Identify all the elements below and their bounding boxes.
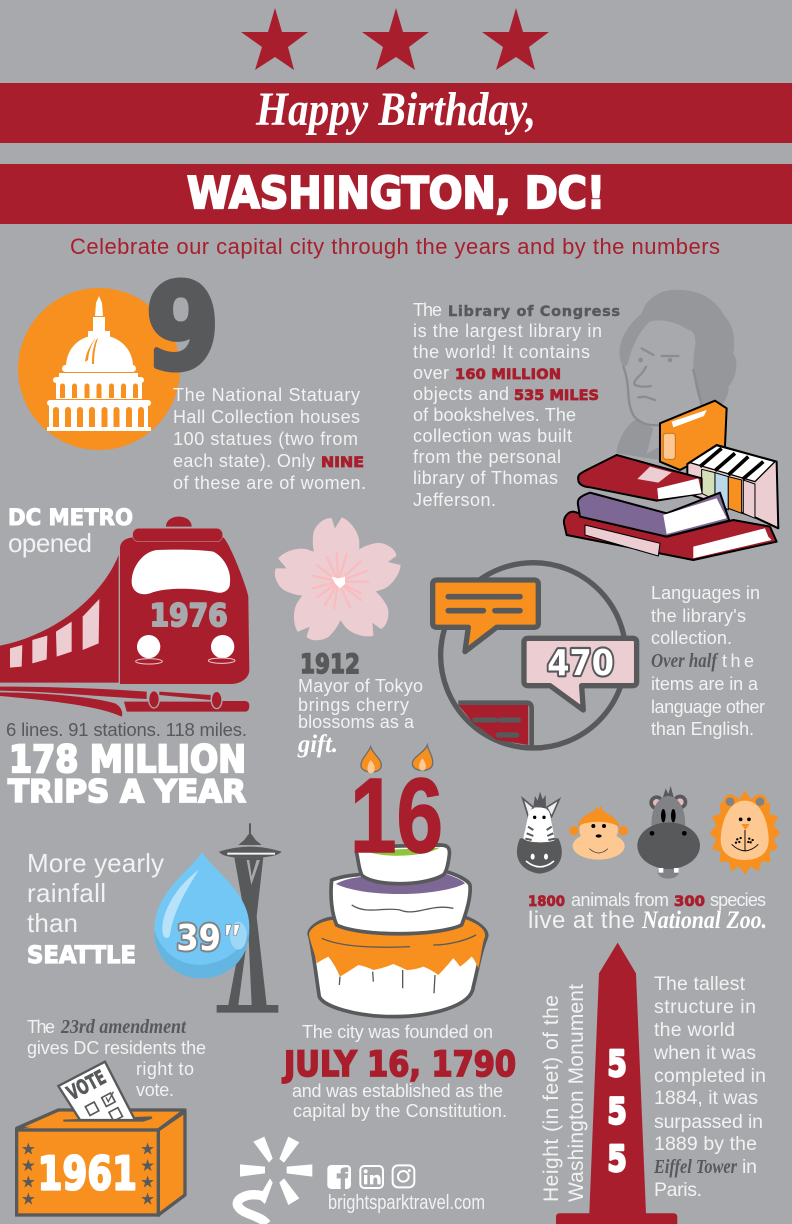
monument text: Eiffel Tower: [653, 1156, 737, 1178]
icon: ballot box: ★: [140, 1173, 155, 1192]
library text: collection was built: [413, 426, 572, 446]
icon: monkey: [569, 805, 628, 860]
statuary text: The National Statuary: [173, 385, 360, 405]
panel: DC metro: [0, 506, 249, 810]
metro stats line: 6 lines. 91 stations. 118 miles.: [6, 719, 247, 740]
library text: 535 MILES: [514, 388, 599, 404]
amendment text: vote.: [136, 1080, 174, 1100]
icon: monument: 5: [607, 1044, 627, 1085]
blossoms text: blossoms as a: [298, 712, 415, 732]
icon: ballot box: ★: [21, 1173, 36, 1192]
statuary text: NINE: [321, 455, 364, 471]
icon: monument: 5: [607, 1139, 627, 1180]
panel: Washington Monument: [540, 943, 766, 1224]
icon: ballot box: ★: [140, 1156, 155, 1175]
panel: 23rd amendment: [17, 1016, 206, 1215]
icon: metro train: [0, 517, 249, 717]
icon: stack of books: [564, 401, 778, 560]
languages text: Over half: [651, 650, 719, 672]
title band: Washington DC: [0, 164, 792, 224]
icon: ballot box: ★: [21, 1156, 36, 1175]
subtitle: Celebrate our capital city through the years and by the numbers: [70, 234, 720, 259]
icon: cake with 16 candles: [309, 745, 487, 1017]
icon: cherry blossom: [269, 517, 406, 649]
statuary text: of these are of women.: [173, 473, 366, 493]
icon: zoo animals: [517, 786, 781, 879]
icon: ballot box: 1961: [38, 1147, 137, 1201]
zoo text: 300: [674, 894, 705, 910]
zoo text: 1800: [528, 894, 565, 910]
panel: national zoo: [517, 786, 781, 934]
zoo text: animals from: [571, 890, 669, 910]
icon: Space Needle: [217, 823, 282, 1013]
languages text: [651, 583, 765, 739]
metro big stat: 178 MILLION: [9, 738, 246, 781]
blossoms text: [297, 649, 423, 758]
icon: monument: 5: [607, 1092, 627, 1133]
icon: rain drop: 39: [176, 918, 221, 959]
icon: speech bubbles circle: 470: [547, 643, 614, 684]
icon: metro train: 1976: [150, 598, 228, 634]
library text: of bookshelves. The: [413, 405, 576, 425]
header stars: [241, 8, 549, 70]
monument text: completed in: [654, 1065, 766, 1087]
panel: statuary hall: [18, 258, 366, 493]
library text: from the personal: [413, 447, 561, 467]
rainfall text: than: [27, 908, 78, 938]
icon: rain drop: [154, 852, 249, 978]
blossoms text: Mayor of Tokyo: [298, 676, 423, 696]
rotated height label: Height (in feet) of the: [540, 995, 563, 1202]
blossoms text: 1912: [300, 649, 360, 680]
rainfall text: rainfall: [27, 878, 106, 908]
founding text: capital by the Constitution.: [293, 1101, 507, 1121]
website: brightsparktravel.com: [328, 1192, 485, 1214]
amendment text: 23rd amendment: [60, 1016, 187, 1038]
portrait: Jefferson: [617, 290, 736, 460]
statuary text: Hall Collection houses: [173, 407, 360, 427]
icon: ballot box: ★: [21, 1189, 36, 1208]
rainfall text: [27, 848, 164, 969]
zoo text: National Zoo.: [641, 907, 767, 934]
heading: DC Metro opened: DC METRO: [8, 506, 133, 531]
title band: Washington DC: WASHINGTON, DC!: [187, 168, 605, 219]
library text: library of Thomas: [413, 468, 558, 488]
library text: [413, 300, 620, 510]
languages text: language other: [651, 697, 765, 717]
zoo text: [528, 890, 767, 934]
library text: 160 MILLION: [455, 367, 561, 383]
zoo text: live at the: [528, 907, 635, 934]
panel: rainfall: [27, 823, 282, 1013]
metro big stat: TRIPS A YEAR: [8, 774, 246, 810]
library text: is the largest library in: [413, 321, 602, 341]
icon: rain drop: ": [218, 915, 242, 963]
monument text: in: [742, 1156, 757, 1178]
statuary text: each state). Only: [173, 451, 315, 471]
founding text: The city was founded on: [302, 1022, 493, 1042]
blossoms text: brings cherry: [298, 695, 409, 715]
amendment text: The: [27, 1017, 55, 1037]
heading: DC Metro opened: opened: [8, 528, 92, 558]
zoo text: species: [710, 890, 766, 910]
title band: Happy Birthday: Happy Birthday,: [255, 83, 536, 136]
panel: library of congress: [413, 290, 778, 560]
metro big stat: [8, 738, 246, 810]
library text: objects and: [413, 384, 509, 404]
languages text: items are in a: [651, 674, 759, 694]
library text: Jefferson.: [413, 490, 496, 510]
founding text: [282, 1022, 516, 1121]
library text: over: [413, 363, 449, 383]
icon: hippo: [637, 786, 700, 879]
monument text: 1889 by the: [654, 1133, 757, 1155]
languages text: than English.: [651, 719, 754, 739]
icon: lion: [709, 791, 781, 875]
big number 9: 9: [146, 258, 219, 396]
monument text: The tallest: [654, 973, 746, 995]
statuary text: [173, 385, 366, 493]
monument text: the world: [654, 1019, 735, 1041]
panel: languages: [433, 563, 765, 748]
languages text: collection.: [651, 628, 732, 648]
monument text: 1884, it was: [654, 1087, 758, 1109]
library text: Library of Congress: [448, 304, 620, 320]
library text: the world! It contains: [413, 342, 590, 362]
rotated height label: [540, 984, 588, 1202]
icons: social media: [327, 1165, 414, 1189]
icon: ballot box: ★: [140, 1189, 155, 1208]
icon: ballot box: ★: [140, 1139, 155, 1158]
icon: orange circle with capitol: [18, 288, 180, 450]
monument text: structure in: [654, 996, 756, 1018]
icon: speech bubbles circle: [433, 563, 637, 748]
monument text: when it was: [653, 1042, 756, 1064]
monument text: surpassed in: [654, 1111, 763, 1133]
heading: DC Metro opened: [8, 506, 133, 558]
panel: birthday cake: [282, 745, 516, 1121]
statuary text: 100 statues (two from: [173, 429, 358, 449]
panel: cherry blossoms: [269, 517, 423, 758]
rainfall text: SEATTLE: [27, 941, 136, 969]
founding text: JULY 16, 1790: [282, 1045, 516, 1085]
amendment text: gives DC residents the: [27, 1038, 206, 1058]
icon: monument: [556, 943, 677, 1224]
blossoms text: gift.: [297, 731, 338, 758]
number 16 on cake: 16: [350, 757, 443, 875]
languages text: the: [722, 651, 754, 671]
monument text: [653, 973, 766, 1201]
panel: bright spark footer: [237, 1137, 485, 1224]
languages text: the library's: [651, 606, 746, 626]
library text: The: [413, 300, 442, 320]
rainfall text: More yearly: [27, 848, 164, 878]
rotated height label: Washington Monument: [565, 984, 588, 1202]
title band: Happy Birthday: [0, 83, 792, 143]
icon: ballot box: [17, 1062, 185, 1215]
icon: ballot box: ★: [21, 1139, 36, 1158]
monument text: Paris.: [654, 1179, 702, 1201]
amendment text: right to: [136, 1059, 194, 1079]
icon: ballot box: VOTE: [63, 1065, 110, 1105]
logo: spark: [237, 1137, 312, 1224]
founding text: and was established as the: [292, 1081, 503, 1101]
amendment text: [27, 1016, 206, 1100]
languages text: Languages in: [651, 583, 760, 603]
icon: zebra: [517, 792, 562, 874]
